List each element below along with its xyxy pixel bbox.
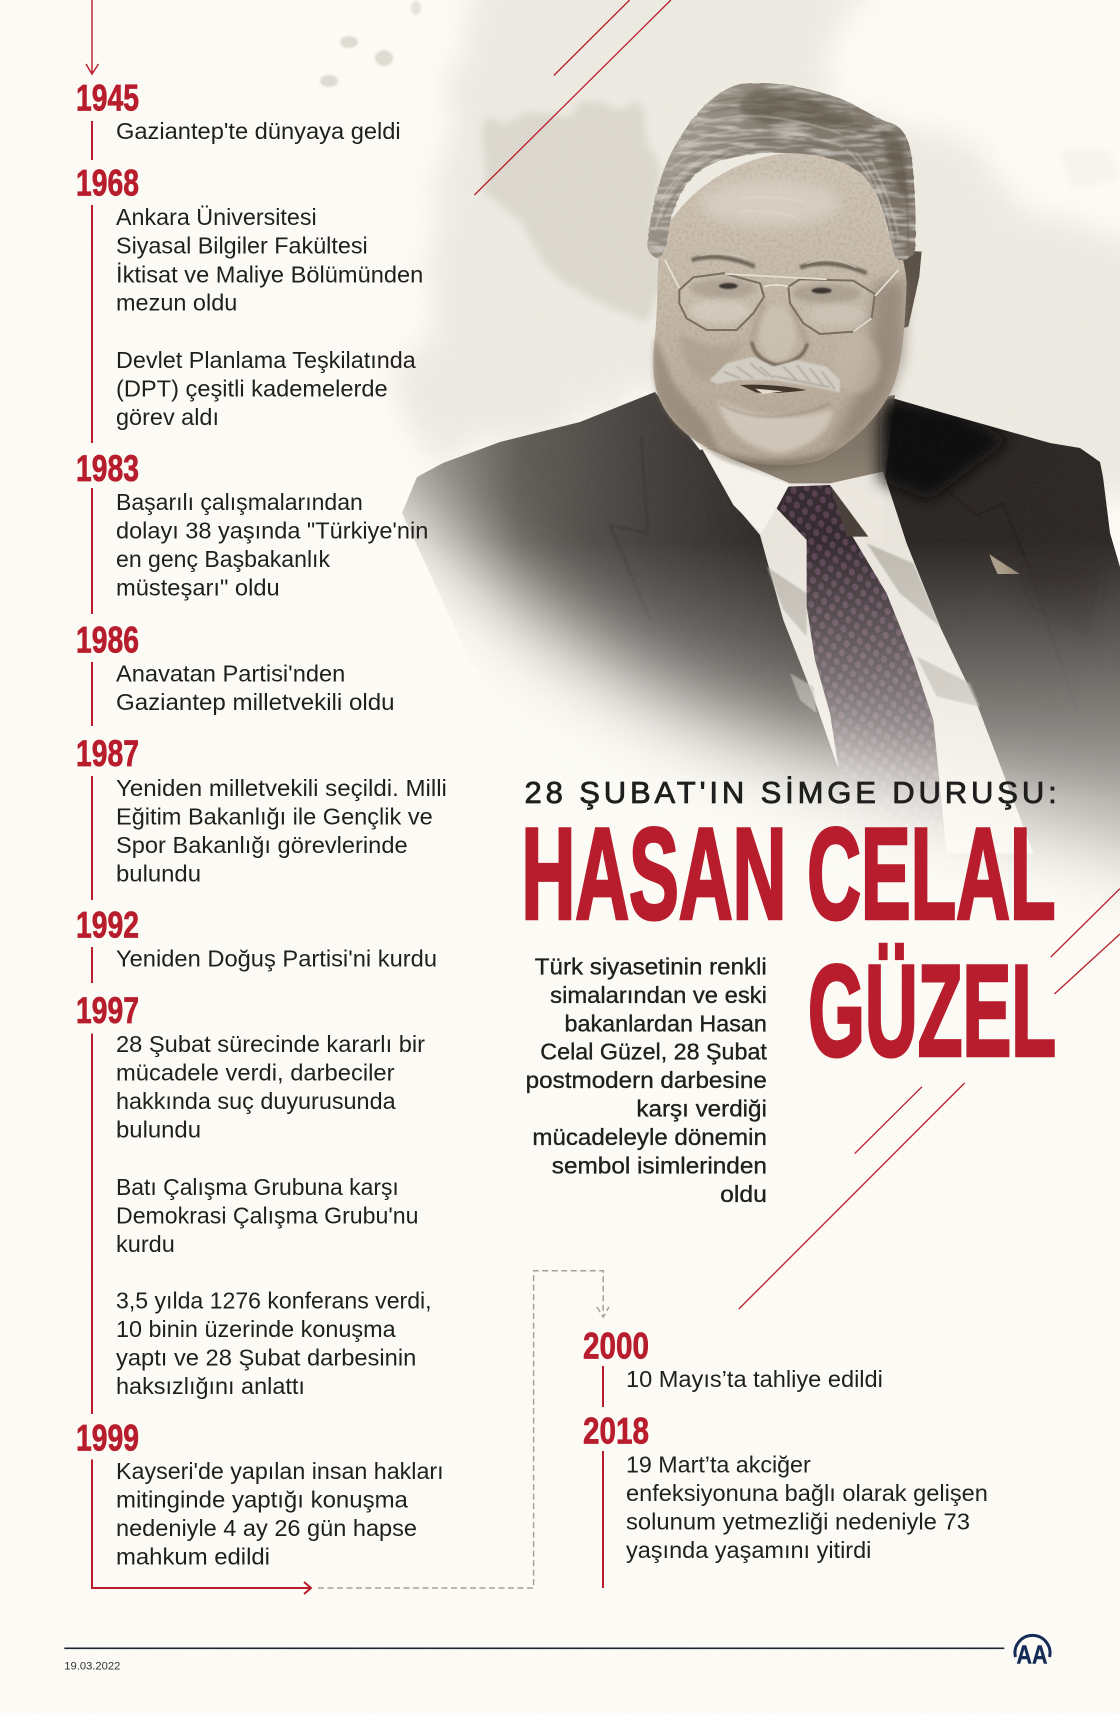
- entry 1997: 28 Şubat sürecinde kararlı bir: [116, 1031, 425, 1057]
- dark collar right: [880, 395, 1100, 640]
- entry 1987: 1987: [76, 733, 139, 774]
- entry 1987: Eğitim Bakanlığı ile Gençlik ve: [116, 804, 433, 830]
- entry 1968: görev aldı: [116, 404, 219, 430]
- entry 1997: hakkında suç duyurusunda: [116, 1088, 396, 1114]
- portrait photo illustration: [402, 83, 1120, 920]
- intro paragraph: karşı verdiği: [636, 1095, 767, 1121]
- hair: [647, 83, 916, 260]
- face: [653, 152, 907, 465]
- intro paragraph: bakanlardan Hasan: [564, 1010, 767, 1036]
- start arrow: [86, 0, 98, 74]
- timeline left column: [76, 0, 447, 1594]
- entry 1983: dolayı 38 yaşında "Türkiye'nin: [116, 518, 428, 544]
- entry 1999: Kayseri'de yapılan insan hakları: [116, 1458, 444, 1484]
- dashed connector arrow: [318, 1271, 609, 1588]
- entry 1987: Yeniden milletvekili seçildi. Milli: [116, 775, 447, 801]
- entry 2018: 19 Mart’ta akciğer: [626, 1452, 811, 1478]
- subtitle: 28 ŞUBAT'IN SİMGE DURUŞU:: [524, 775, 1057, 810]
- entry 1992: 1992: [76, 905, 139, 946]
- lower body: shirt, tie and lapels: [700, 440, 1077, 853]
- entry 2000: 10 Mayıs’ta tahliye edildi: [626, 1366, 883, 1392]
- entry 1945: [76, 77, 401, 160]
- hair streaks: [655, 90, 908, 247]
- entry 2018: yaşında yaşamını yitirdi: [626, 1537, 871, 1563]
- entry 1999: mitinginde yaptığı konuşma: [116, 1486, 408, 1512]
- entry 1987: bulundu: [116, 861, 201, 887]
- entry 1945: Gaziantep'te dünyaya geldi: [116, 118, 401, 144]
- timeline right column: [583, 1325, 988, 1588]
- footer rule: [64, 1648, 1004, 1649]
- entry 2018: 2018: [583, 1411, 649, 1452]
- intro paragraph: simalarından ve eski: [550, 982, 767, 1008]
- entry 1968: (DPT) çeşitli kademelerde: [116, 376, 388, 402]
- entry 1997: bulundu: [116, 1116, 201, 1142]
- entry 1999: mahkum edildi: [116, 1543, 270, 1569]
- intro paragraph: [526, 953, 768, 1207]
- entry 1997: yaptı ve 28 Şubat darbesinin: [116, 1345, 416, 1371]
- entry 1983: en genç Başbakanlık: [116, 546, 330, 572]
- entry 1987: Spor Bakanlığı görevlerinde: [116, 832, 408, 858]
- entry 2018: enfeksiyonuna bağlı olarak gelişen: [626, 1480, 988, 1506]
- entry 1945: 1945: [76, 77, 139, 118]
- mustache: [710, 357, 840, 393]
- entry 1983: müsteşarı" oldu: [116, 575, 280, 601]
- facial shading: [653, 180, 907, 470]
- ear: [893, 250, 922, 330]
- forehead wrinkles: [740, 197, 803, 217]
- entry 1983: Başarılı çalışmalarından: [116, 489, 363, 515]
- entry 2000: [583, 1325, 883, 1407]
- neck: [690, 395, 895, 486]
- entry 1999: nedeniyle 4 ay 26 gün hapse: [116, 1515, 417, 1541]
- entry 1987: [76, 733, 447, 900]
- decorative red diagonal lines: [474, 0, 1120, 1309]
- intro paragraph: postmodern darbesine: [526, 1067, 767, 1093]
- entry 1986: 1986: [76, 620, 139, 660]
- main title: [522, 800, 1056, 1084]
- head: [647, 83, 922, 470]
- entry 1968: İktisat ve Maliye Bölümünden: [116, 261, 423, 287]
- intro paragraph: Türk siyasetinin renkli: [535, 953, 767, 979]
- entry 1997: 3,5 yılda 1276 konferans verdi,: [116, 1288, 432, 1314]
- entry 1992: [76, 905, 437, 983]
- entry 1968: mezun oldu: [116, 290, 237, 316]
- eyebrows: [692, 257, 867, 273]
- entry 2018: [583, 1411, 988, 1588]
- intro paragraph: Celal Güzel, 28 Şubat: [540, 1038, 768, 1064]
- entry 1986: Anavatan Partisi'nden: [116, 660, 345, 686]
- soft fade over lower portrait: [280, 470, 1120, 1400]
- AA logo: AA: [1016, 1640, 1048, 1670]
- entry 2018: solunum yetmezliği nedeniyle 73: [626, 1509, 970, 1535]
- entry 1968: [76, 163, 423, 443]
- entry 1968: Ankara Üniversitesi: [116, 204, 317, 230]
- jacket: [402, 392, 1120, 920]
- entry 1997: mücadele verdi, darbeciler: [116, 1059, 395, 1085]
- entry 1986: Gaziantep milletvekili oldu: [116, 689, 394, 715]
- mouth: [740, 385, 807, 393]
- entry 1997: Batı Çalışma Grubuna karşı: [116, 1174, 399, 1200]
- entry 1997: Demokrasi Çalışma Grubu'nu: [116, 1202, 418, 1228]
- pin: [989, 554, 1020, 574]
- entry 1999: [76, 1417, 444, 1594]
- intro paragraph: oldu: [720, 1181, 767, 1207]
- entry 1997: 10 binin üzerinde konuşma: [116, 1316, 396, 1342]
- entry 1997: kurdu: [116, 1231, 175, 1257]
- vertical lightening over lower jacket: [400, 540, 1120, 940]
- entry 1968: Devlet Planlama Teşkilatında: [116, 347, 416, 373]
- entry 1968: Siyasal Bilgiler Fakültesi: [116, 233, 368, 259]
- entry 1968: 1968: [76, 163, 139, 204]
- entry 1997: [76, 990, 432, 1414]
- entry 2000: 2000: [583, 1325, 649, 1366]
- date: 19.03.2022: [64, 1660, 120, 1672]
- entry 1986: [76, 620, 394, 726]
- watercolor wash behind portrait: [320, 0, 1120, 500]
- entry 1992: Yeniden Doğuş Partisi'ni kurdu: [116, 946, 437, 972]
- eyes: [719, 283, 738, 289]
- glasses: [679, 273, 875, 334]
- entry 1997: haksızlığını anlattı: [116, 1373, 305, 1399]
- nose: [752, 342, 807, 365]
- entry 1983: 1983: [76, 448, 139, 489]
- entry 1999: 1999: [76, 1417, 139, 1458]
- left lapel shadow: [610, 437, 650, 620]
- entry 1997: 1997: [76, 990, 139, 1031]
- intro paragraph: mücadeleyle dönemin: [532, 1124, 767, 1150]
- intro paragraph: sembol isimlerinden: [552, 1153, 767, 1179]
- entry 1983: [76, 448, 428, 614]
